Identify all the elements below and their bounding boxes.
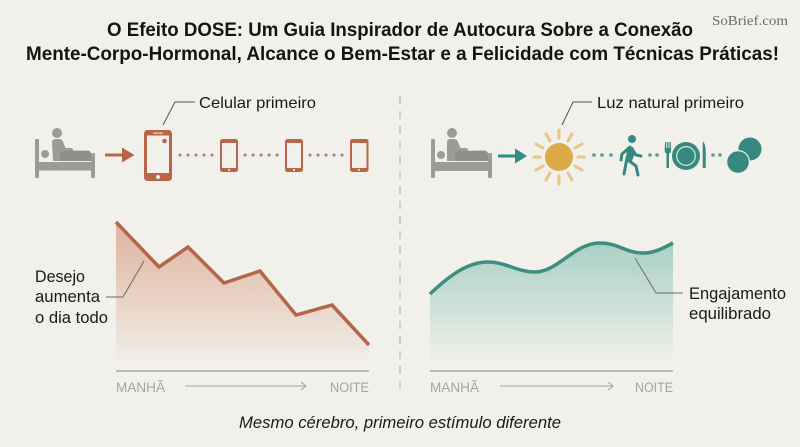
brand watermark: SoBrief.com bbox=[712, 13, 789, 28]
callout: Desejo aumenta: o dia todo bbox=[35, 309, 108, 327]
callout: Luz natural primeiro bbox=[562, 95, 744, 125]
icon: fork plate knife bbox=[665, 142, 706, 170]
icon: large phone bbox=[144, 130, 172, 181]
center divider bbox=[399, 96, 401, 392]
callout: Desejo aumenta: Desejo bbox=[35, 268, 85, 286]
title: O Efeito DOSE: Um Guia Inspirador de Autocura Sobre a Conexão bbox=[107, 19, 693, 41]
title bbox=[26, 19, 779, 65]
axis labels: right: MANHÃ bbox=[430, 380, 479, 395]
callout: Engajamento equilibrado: equilibrado bbox=[689, 305, 771, 323]
callout: Engajamento equilibrado: Engajamento bbox=[689, 285, 786, 303]
dotted connector bbox=[592, 153, 722, 157]
arrow: to phone bbox=[105, 148, 134, 162]
axis labels: right bbox=[430, 380, 673, 395]
callout: Luz natural primeiro: Luz natural primeiro bbox=[597, 95, 744, 112]
chart: engagement area bbox=[430, 243, 673, 371]
callout: Desejo aumenta: aumenta bbox=[35, 288, 101, 306]
panel: phone first bbox=[35, 95, 368, 181]
title: Mente-Corpo-Hormonal, Alcance o Bem-Estar e a Felicidade com Técnicas Práticas! bbox=[26, 43, 779, 65]
callout: Celular primeiro: Celular primeiro bbox=[199, 95, 316, 112]
dotted connectors bbox=[178, 153, 344, 157]
icon: person in bed bbox=[431, 128, 492, 178]
axis labels: right: NOITE bbox=[635, 380, 673, 395]
axis labels: left: NOITE bbox=[330, 380, 369, 395]
icon: person in bed bbox=[35, 128, 95, 178]
icon: small phone 1 bbox=[220, 139, 238, 172]
icon: walking person bbox=[621, 135, 641, 175]
caption: Mesmo cérebro, primeiro estímulo diferente bbox=[239, 414, 561, 432]
panel: natural light first bbox=[431, 95, 762, 184]
axis labels: left bbox=[116, 380, 369, 395]
icon: overlapping circles bbox=[726, 138, 762, 174]
axis labels: left: MANHÃ bbox=[116, 380, 165, 395]
chart: craving area bbox=[116, 222, 369, 371]
callout: Desejo aumenta bbox=[35, 261, 144, 327]
callout: Celular primeiro bbox=[163, 95, 316, 125]
icon: sun bbox=[534, 130, 584, 184]
callout: Engajamento equilibrado bbox=[635, 258, 786, 323]
arrow: to sun bbox=[498, 148, 527, 164]
icon: small phone 2 bbox=[285, 139, 303, 172]
icon: small phone 3 bbox=[350, 139, 368, 172]
